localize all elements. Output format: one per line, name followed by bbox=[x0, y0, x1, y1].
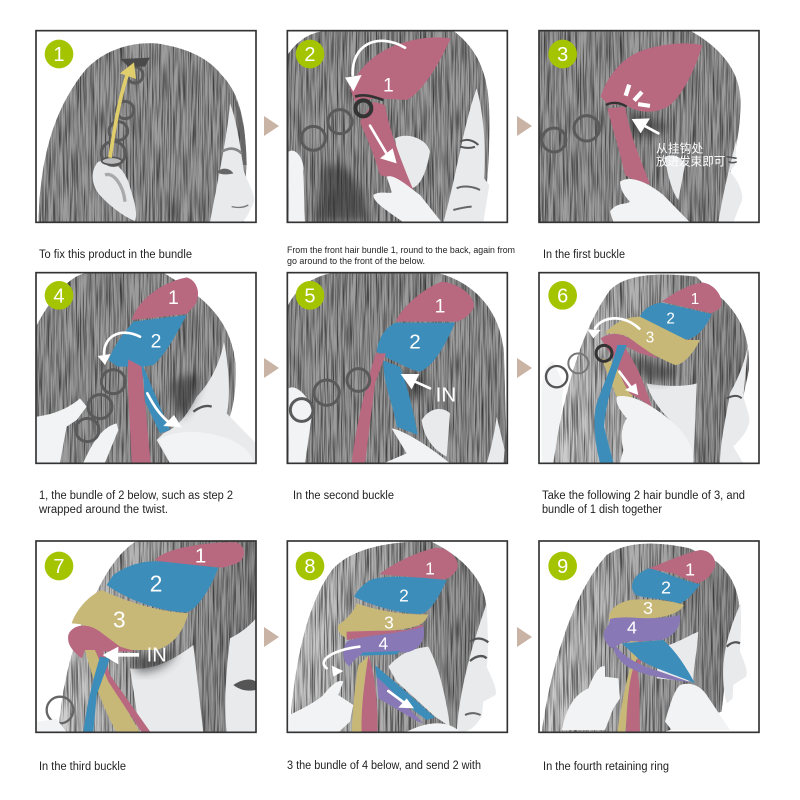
blue bundle 2 bbox=[108, 315, 187, 433]
face bbox=[210, 103, 254, 222]
numbers: 3 bbox=[384, 612, 394, 632]
caption 9: In the fourth retaining ring bbox=[543, 761, 669, 773]
white dashes bbox=[624, 84, 650, 108]
panel: step 6 bbox=[539, 273, 759, 463]
panel: step 8 bbox=[287, 541, 507, 732]
yellow strand bbox=[617, 641, 640, 732]
pink bundle 1 bbox=[662, 283, 721, 313]
yellow strand bbox=[352, 656, 368, 732]
hook and hand bbox=[37, 697, 73, 732]
numbers: 1 bbox=[425, 558, 435, 578]
step badge 3 bbox=[548, 40, 577, 68]
caption 6 bbox=[542, 490, 745, 516]
hook ornament bbox=[290, 369, 370, 421]
caption 8: 3 the bundle of 4 below, and send 2 with bbox=[287, 760, 481, 772]
face bbox=[422, 409, 450, 457]
arrow: curved bbox=[324, 647, 359, 677]
step badge 8: 8 bbox=[304, 556, 316, 578]
hook ornament bbox=[546, 345, 612, 387]
blue bundle 2 bbox=[632, 568, 700, 603]
pink strand bbox=[601, 334, 658, 407]
blue strand bbox=[383, 361, 418, 435]
pink strand bbox=[128, 359, 151, 463]
chinese note: 放进发束即可 bbox=[656, 155, 726, 169]
arrow: 4 to 5 bbox=[264, 358, 279, 378]
panel: step 7 bbox=[36, 541, 256, 732]
panel: step 2 bbox=[287, 31, 507, 222]
panel: step 4 bbox=[36, 273, 256, 463]
numbers bbox=[379, 558, 435, 654]
pink bundle 1 bbox=[350, 37, 451, 102]
pink strand bbox=[362, 656, 378, 732]
arrow: 5 to 6 bbox=[517, 358, 532, 378]
numbers: 1 bbox=[691, 291, 699, 308]
step badge 2: 2 bbox=[304, 44, 316, 66]
numbers and IN: IN bbox=[436, 384, 456, 407]
face bbox=[457, 603, 496, 732]
numbers: 2 bbox=[666, 310, 675, 327]
step badge 6 bbox=[548, 281, 577, 310]
yellow bundle 3 bbox=[338, 603, 428, 638]
ear bbox=[93, 161, 136, 221]
arrow: 2 to 3 bbox=[517, 116, 532, 136]
step badge 9: 9 bbox=[557, 556, 568, 578]
arrow: curved bbox=[587, 318, 639, 338]
yellow strand bbox=[602, 358, 633, 398]
step badge 2 bbox=[296, 40, 324, 68]
numbers: 1 bbox=[685, 560, 695, 580]
hands bbox=[562, 666, 730, 730]
numbers: 2 bbox=[399, 586, 409, 606]
caption 4 bbox=[38, 490, 233, 516]
face bbox=[718, 138, 742, 222]
pink fold bbox=[347, 624, 423, 640]
step badge 6: 6 bbox=[557, 285, 568, 307]
step badge 5: 5 bbox=[304, 285, 316, 307]
numbers and IN bbox=[409, 297, 456, 407]
pink fold bbox=[68, 626, 137, 658]
caption 2: go around to the front of the below. bbox=[287, 256, 425, 267]
blue bundle 2 bbox=[354, 577, 447, 614]
step badge 9 bbox=[548, 552, 577, 580]
pink strand bbox=[607, 107, 650, 184]
panel: step 3 bbox=[539, 31, 759, 222]
caption 2: From the front hair bundle 1, round to the back, again from bbox=[287, 245, 515, 256]
blue bundle 2 bbox=[377, 323, 455, 372]
caption 3: In the first buckle bbox=[543, 249, 625, 261]
numbers and IN: 2 bbox=[150, 571, 162, 597]
face bbox=[723, 603, 747, 703]
blue band bbox=[360, 651, 400, 656]
pink bundle 1 bbox=[648, 550, 715, 583]
step badge 4: 4 bbox=[53, 285, 65, 307]
blue bundle 2 bbox=[640, 303, 712, 339]
pink strand bbox=[95, 650, 151, 732]
blue strand bbox=[83, 657, 110, 732]
arrow: yellow bbox=[110, 62, 136, 158]
hands bbox=[289, 151, 442, 222]
numbers and IN bbox=[113, 544, 206, 667]
hands bbox=[36, 398, 253, 463]
blue strand bbox=[594, 345, 627, 463]
numbers bbox=[627, 560, 695, 638]
hook ornament bbox=[101, 58, 150, 165]
face bbox=[720, 343, 749, 463]
blue strand bbox=[622, 640, 695, 683]
yellow bundle 3 bbox=[605, 317, 700, 365]
hand bbox=[289, 681, 460, 732]
pink bundle 1 bbox=[601, 43, 702, 112]
step badge 5 bbox=[296, 281, 324, 310]
chinese note bbox=[656, 141, 726, 169]
step badge 7: 7 bbox=[53, 556, 65, 578]
numbers: 4 bbox=[627, 618, 637, 638]
caption 4: 1, the bundle of 2 below, such as step 2 bbox=[39, 490, 233, 502]
numbers and IN: 2 bbox=[409, 331, 421, 354]
arrow: in bbox=[103, 647, 139, 664]
face bbox=[443, 88, 489, 222]
face bbox=[157, 342, 256, 463]
numbers bbox=[152, 290, 178, 348]
hook ornament bbox=[301, 95, 383, 150]
blue bundle 2 bbox=[107, 561, 218, 612]
pink bundle 1 bbox=[155, 542, 244, 568]
arrow: 1 to 2 bbox=[264, 116, 279, 136]
step badge 7 bbox=[45, 552, 73, 580]
pink strand bbox=[626, 641, 648, 732]
pink bundle 1 bbox=[396, 282, 474, 322]
step badge 8 bbox=[296, 552, 324, 580]
arrow: down strand bbox=[619, 372, 638, 395]
arrow: curved bbox=[345, 41, 405, 92]
numbers: 1 bbox=[168, 288, 179, 309]
numbers: 2 bbox=[661, 578, 671, 598]
arrow: to hook bbox=[632, 118, 658, 133]
numbers: 2 bbox=[151, 331, 161, 352]
hands bbox=[289, 387, 450, 463]
caption 4: wrapped around the twist. bbox=[38, 504, 168, 516]
purple strand bbox=[613, 643, 692, 683]
caption 5: In the second buckle bbox=[293, 490, 394, 502]
arrow: down strand bbox=[147, 393, 182, 427]
panel: step 5 bbox=[287, 273, 507, 463]
yellow bundle 3 bbox=[72, 590, 188, 650]
hand bbox=[610, 179, 690, 222]
purple strand bbox=[377, 677, 423, 723]
step badge 1 bbox=[45, 40, 73, 68]
number 1: 1 bbox=[383, 76, 394, 97]
arrow: down strand bbox=[388, 691, 414, 708]
step badge 3: 3 bbox=[557, 44, 568, 66]
hook ornament bbox=[542, 103, 627, 152]
caption 1: To fix this product in the bundle bbox=[39, 249, 192, 261]
numbers: 3 bbox=[646, 329, 654, 346]
yellow strand bbox=[85, 650, 140, 732]
caption 2 bbox=[287, 245, 515, 267]
panel: step 1 bbox=[36, 31, 256, 222]
purple bundle 4 bbox=[604, 615, 680, 648]
caption 6: bundle of 1 dish together bbox=[542, 504, 662, 516]
pink strand bbox=[360, 102, 413, 190]
pink strand bbox=[352, 353, 386, 463]
chinese note: 从挂钩处 bbox=[656, 141, 704, 155]
purple bundle 4 bbox=[343, 627, 424, 667]
arrow: 7 to 8 bbox=[264, 627, 279, 647]
arrow: curved bbox=[98, 333, 140, 365]
numbers and IN: 1 bbox=[435, 297, 445, 318]
caption 7: In the third buckle bbox=[39, 761, 126, 773]
numbers: 3 bbox=[643, 598, 653, 618]
numbers: 4 bbox=[379, 634, 389, 654]
numbers and IN: 1 bbox=[195, 544, 206, 567]
arrow: 8 to 9 bbox=[517, 627, 532, 647]
blue strand bbox=[375, 665, 435, 720]
arrow: in bbox=[401, 374, 430, 389]
step badge 1: 1 bbox=[53, 44, 65, 66]
numbers bbox=[646, 291, 699, 346]
panel: step 9 bbox=[539, 541, 759, 732]
face bbox=[130, 645, 203, 732]
hands bbox=[542, 362, 694, 463]
yellow bundle 3 bbox=[609, 599, 684, 621]
hook ornament bbox=[76, 370, 125, 442]
pink bundle 1 bbox=[132, 277, 198, 320]
pink bundle 1 bbox=[379, 548, 458, 580]
caption 6: Take the following 2 hair bundle of 3, and bbox=[542, 490, 745, 502]
step badge 4 bbox=[45, 281, 73, 310]
arrow: down strand bbox=[370, 126, 397, 163]
numbers and IN: 3 bbox=[113, 607, 126, 633]
numbers and IN: IN bbox=[147, 644, 167, 667]
